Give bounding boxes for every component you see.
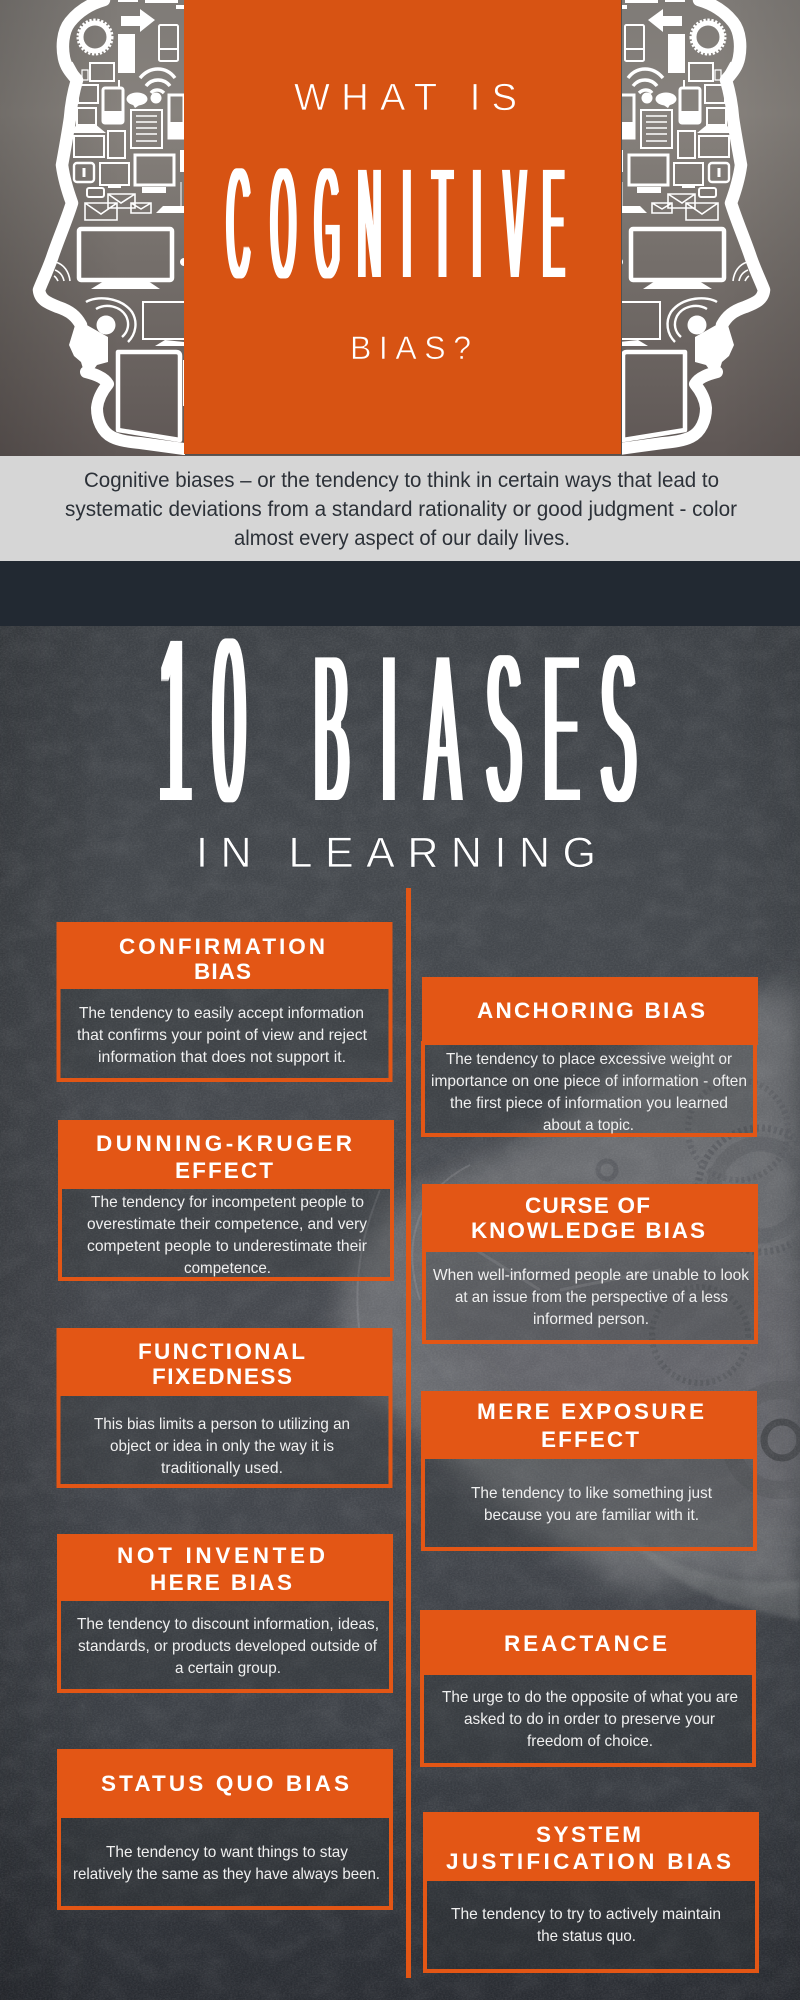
panel: dunning-kruger effect: The tendency for incompetent people to xyxy=(91,1194,364,1211)
gears xyxy=(460,1080,800,1490)
panel: reactance: asked to do in order to preserve your xyxy=(464,1711,716,1728)
panel: functional fixedness: FIXEDNESS xyxy=(152,1364,292,1389)
panel: confirmation bias xyxy=(56,922,392,1080)
dark separator band xyxy=(0,561,800,626)
panel: dunning-kruger effect: competent people to underestimate their xyxy=(87,1238,368,1255)
panel: mere exposure effect: because you are familiar with it. xyxy=(484,1507,699,1524)
panel: intro text band: Cognitive biases – or the tendency to think in certain ways that lead to xyxy=(84,469,719,492)
panel: intro text band: systematic deviations from a standard rationality or good judgment - color xyxy=(65,498,737,521)
panel: status quo bias: The tendency to want things to stay xyxy=(106,1844,348,1861)
panel: functional fixedness: object or idea in only the way it is xyxy=(110,1438,334,1455)
brain shape xyxy=(339,985,800,1592)
panel: dunning-kruger effect: DUNNING-KRUGER xyxy=(96,1131,352,1156)
panel: dunning-kruger effect: overestimate their competence, and very xyxy=(87,1216,367,1233)
title line: bias: BIAS? xyxy=(350,330,471,366)
panel: system justification bias: SYSTEM xyxy=(536,1822,641,1847)
panel: mere exposure effect xyxy=(421,1391,757,1549)
panel: curse of knowledge bias xyxy=(422,1184,758,1342)
heading: 10 biases: BIASES xyxy=(314,609,636,850)
panel: curse of knowledge bias: at an issue from the perspective of a less xyxy=(455,1289,728,1306)
panel: mere exposure effect: The tendency to like something just xyxy=(471,1485,713,1502)
panel: dunning-kruger effect xyxy=(58,1120,394,1279)
panel: confirmation bias: information that does not support it. xyxy=(98,1049,346,1066)
panel: not invented here bias: The tendency to discount information, ideas, xyxy=(77,1616,379,1633)
panel: curse of knowledge bias: informed person. xyxy=(533,1311,649,1328)
panel: system justification bias xyxy=(423,1812,759,1971)
panel: curse of knowledge bias: CURSE OF xyxy=(525,1193,650,1218)
panel: not invented here bias: standards, or products developed outside of xyxy=(78,1638,378,1655)
panel: not invented here bias: HERE BIAS xyxy=(150,1570,292,1595)
subheading: in learning: IN LEARNING xyxy=(196,829,596,877)
panel: not invented here bias xyxy=(57,1534,393,1691)
central vertical divider xyxy=(406,888,411,1978)
panel: reactance: The urge to do the opposite of what you are xyxy=(442,1689,738,1706)
panel: anchoring bias xyxy=(422,977,758,1135)
panel: curse of knowledge bias: KNOWLEDGE BIAS xyxy=(471,1218,705,1243)
panel: mere exposure effect: EFFECT xyxy=(541,1427,639,1452)
panel: anchoring bias: importance on one piece of information - often xyxy=(431,1073,747,1090)
panel: curse of knowledge bias: When well-informed people are unable to look xyxy=(433,1267,750,1284)
panel: orange title card xyxy=(184,0,622,455)
panel: functional fixedness: This bias limits a person to utilizing an xyxy=(94,1416,350,1433)
panel: functional fixedness xyxy=(56,1328,392,1486)
panel: not invented here bias: a certain group. xyxy=(175,1660,281,1677)
panel: status quo bias: relatively the same as they have always been. xyxy=(73,1866,380,1883)
panel: system justification bias: JUSTIFICATION BIAS xyxy=(446,1849,731,1874)
panel: status quo bias: STATUS QUO BIAS xyxy=(101,1771,349,1796)
panel: not invented here bias: NOT INVENTED xyxy=(117,1543,325,1568)
panel: reactance: REACTANCE xyxy=(504,1631,667,1656)
panel: confirmation bias: The tendency to easily accept information xyxy=(79,1005,364,1022)
panel: system justification bias: the status quo. xyxy=(537,1928,636,1945)
panel: header background xyxy=(0,0,800,456)
panel: dunning-kruger effect: EFFECT xyxy=(175,1158,273,1183)
panel: functional fixedness: FUNCTIONAL xyxy=(138,1339,305,1364)
title: cognitive: COGNITIVE xyxy=(227,136,564,313)
panel: anchoring bias: ANCHORING BIAS xyxy=(477,998,705,1023)
panel: confirmation bias: CONFIRMATION xyxy=(119,934,325,959)
panel: intro text band xyxy=(0,456,800,561)
title line: what is: WHAT IS xyxy=(294,77,517,119)
panel: confirmation bias: BIAS xyxy=(194,959,251,984)
heading: 10 biases xyxy=(159,586,636,854)
panel: intro text band: almost every aspect of our daily lives. xyxy=(234,527,570,550)
panel: dunning-kruger effect: competence. xyxy=(184,1260,271,1277)
panel: functional fixedness: traditionally used. xyxy=(161,1460,283,1477)
panel: anchoring bias: about a topic. xyxy=(543,1117,634,1134)
heading: 10 biases: 10 xyxy=(159,586,245,854)
panel: confirmation bias: that confirms your point of view and reject xyxy=(77,1027,368,1044)
panel: anchoring bias: The tendency to place excessive weight or xyxy=(446,1051,733,1068)
panel: status quo bias xyxy=(57,1749,393,1908)
panel: system justification bias: The tendency to try to actively maintain xyxy=(451,1906,721,1923)
panel: anchoring bias: the first piece of information you learned xyxy=(450,1095,728,1112)
panel: textured background with brain and gears xyxy=(0,626,800,2000)
etched texture xyxy=(0,626,800,2000)
panel: reactance: freedom of choice. xyxy=(527,1733,653,1750)
panel: mere exposure effect: MERE EXPOSURE xyxy=(477,1399,704,1424)
icon: left head made of devices xyxy=(39,0,188,449)
icon: right head made of devices xyxy=(615,0,764,449)
panel: reactance xyxy=(420,1610,756,1765)
